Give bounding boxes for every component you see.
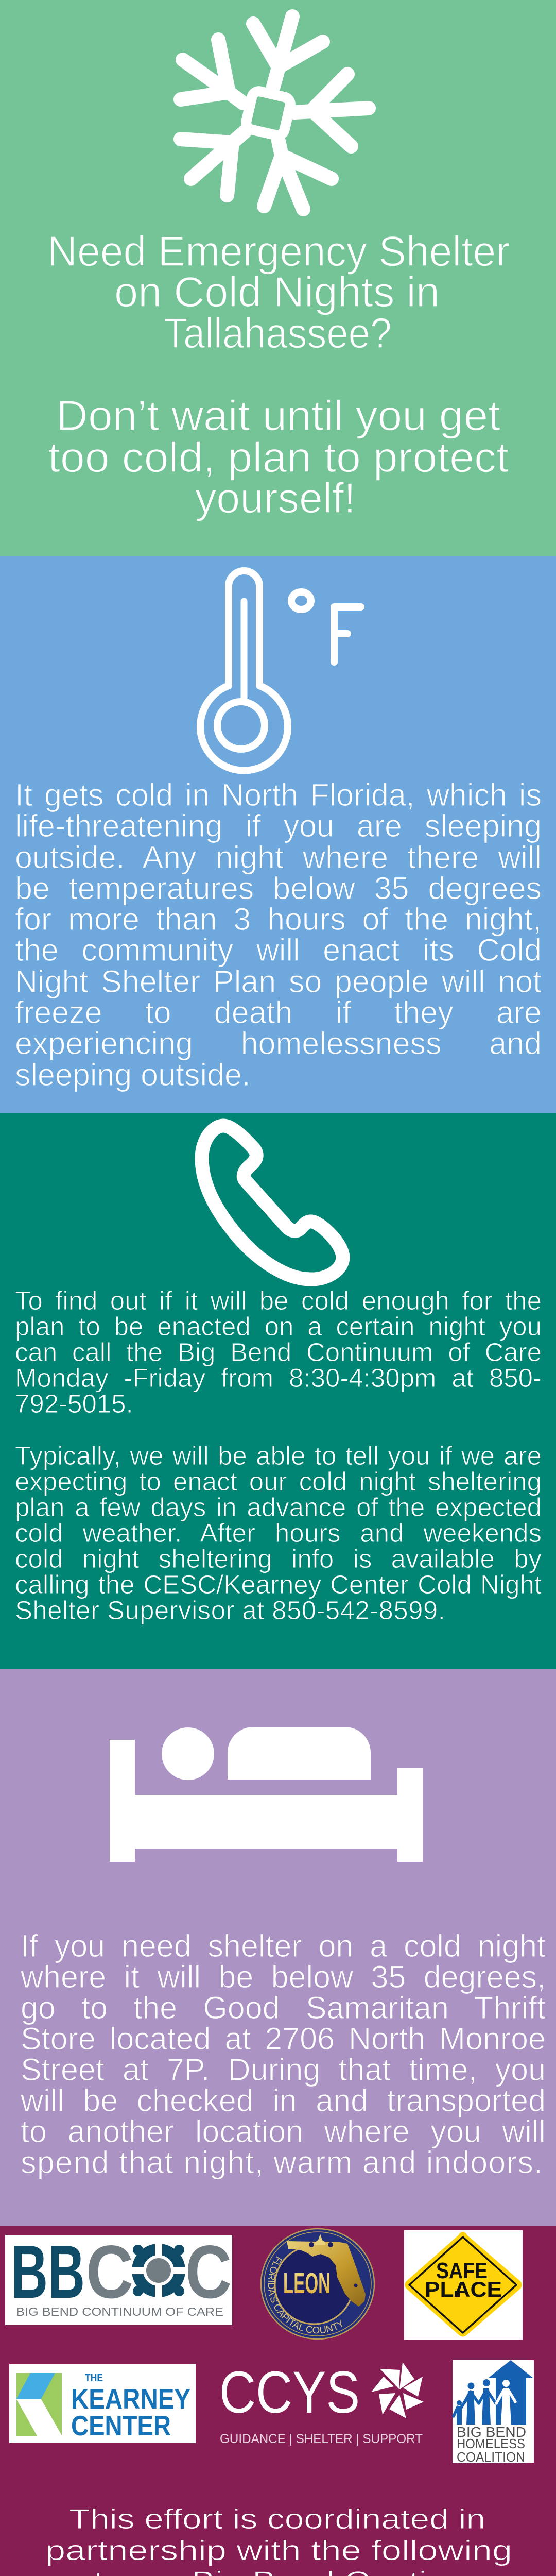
logo: The Kearney Center: THE <box>85 2372 103 2384</box>
text: phone numbers and hours: plan a few days in advance of the expected <box>15 1493 542 1522</box>
text: when the plan is enacted: Night Shelter Plan so people will not <box>15 964 542 999</box>
logo: CCYS <box>219 2360 424 2446</box>
text: partners list: partnership with the following <box>45 2534 512 2566</box>
title: Tallahassee? <box>164 309 392 357</box>
text: when the plan is enacted: the community will enact its Cold <box>15 933 542 968</box>
logo: Leon County seal <box>260 2228 375 2340</box>
icon: bed <box>110 1727 423 1862</box>
panel: cold threshold <box>0 556 556 1113</box>
logo: CCYS: GUIDANCE | SHELTER | SUPPORT <box>220 2432 423 2446</box>
logo: Big Bend Continuum of Care: BIG BEND CONTINUUM OF CARE <box>16 2305 223 2318</box>
icon: snowflake <box>181 16 369 209</box>
panel: how to find out <box>0 1113 556 1669</box>
text: shelter location <box>21 1930 546 2183</box>
logo: Leon County seal: FLORIDA’S CAPITAL COUNTY <box>268 2256 343 2334</box>
logo: Safe Place: PLACE <box>425 2277 502 2301</box>
text: phone numbers and hours: expecting to enact our cold night sheltering <box>15 1467 542 1496</box>
text: when the plan is enacted: for more than 3 hours of the night, <box>15 902 542 937</box>
logo: Big Bend Homeless Coalition: BIG BEND <box>457 2424 526 2440</box>
panel: where to go <box>0 1669 556 2226</box>
text: when the plan is enacted: freeze to death if they are <box>15 995 542 1030</box>
logo: Safe Place <box>404 2230 523 2340</box>
text: when the plan is enacted: sleeping outside. <box>15 1057 251 1092</box>
text: shelter location: where it will be below 35 degrees, <box>21 1959 546 1994</box>
text: when the plan is enacted: experiencing homelessness and <box>15 1026 542 1061</box>
logo: The Kearney Center: CENTER <box>71 2410 171 2442</box>
title: too cold, plan to protect <box>48 433 509 481</box>
text: when the plan is enacted <box>15 779 542 1094</box>
panel: intro <box>0 0 556 556</box>
text: shelter location: Street at 7P. During that time, you <box>21 2052 546 2087</box>
text: when the plan is enacted: outside. Any night where there will <box>15 840 542 875</box>
text: phone numbers and hours: can call the Big Bend Continuum of Care <box>15 1337 542 1367</box>
title <box>47 227 510 522</box>
panel: partners <box>0 2226 556 2576</box>
logo: The Kearney Center: KEARNEY <box>71 2383 190 2415</box>
logo: The Kearney Center <box>9 2364 196 2443</box>
text: phone numbers and hours: 792-5015. <box>15 1389 133 1418</box>
logo: Big Bend Homeless Coalition: COALITION <box>457 2449 525 2465</box>
text: phone numbers and hours: Shelter Supervisor at 850-542-8599. <box>15 1596 445 1625</box>
logo: Big Bend Continuum of Care: C <box>185 2230 232 2314</box>
title: Don’t wait until you get <box>56 392 500 439</box>
text: phone numbers and hours: cold night sheltering info is available by <box>15 1544 542 1573</box>
text: phone numbers and hours: cold weather. After hours and weekends <box>15 1518 542 1548</box>
icon: thermometer with degrees F <box>200 571 361 771</box>
logo: Big Bend Homeless Coalition: HOMELESS <box>457 2436 525 2451</box>
text: partners list: This effort is coordinated in <box>69 2503 485 2535</box>
title: Need Emergency Shelter <box>47 227 510 275</box>
text: when the plan is enacted: life-threatening if you are sleeping <box>15 808 542 843</box>
title: yourself! <box>195 474 356 522</box>
logo: Big Bend Continuum of Care <box>5 2230 232 2325</box>
text: shelter location: go to the Good Samaritan Thrift <box>21 1990 546 2025</box>
text: shelter location: will be checked in and transported <box>21 2083 546 2118</box>
title: on Cold Nights in <box>114 268 440 316</box>
text: shelter location: spend that night, warm and indoors. <box>21 2145 543 2180</box>
text: shelter location: to another location where you will <box>21 2114 546 2149</box>
text: phone numbers and hours: Monday -Friday from 8:30-4:30pm at 850- <box>15 1363 542 1393</box>
text: shelter location: Store located at 2706 North Monroe <box>21 2021 546 2056</box>
logo: Big Bend Homeless Coalition <box>453 2360 534 2465</box>
text: phone numbers and hours: calling the CESC/Kearney Center Cold Night <box>15 1570 542 1599</box>
logo: Big Bend Continuum of Care: BB <box>11 2230 85 2314</box>
text: when the plan is enacted: be temperatures below 35 degrees <box>15 871 542 906</box>
logo: Big Bend Continuum of Care: C <box>86 2230 133 2314</box>
logo: Safe Place: SAFE <box>436 2258 488 2283</box>
logo: CCYS: CCYS <box>219 2360 360 2426</box>
icon: phone handset <box>202 1126 343 1279</box>
text: partners list <box>43 2503 515 2576</box>
logo: Leon County seal: LEON <box>283 2267 331 2300</box>
text: phone numbers and hours <box>15 1288 542 1628</box>
text: phone numbers and hours: plan to be enacted on a certain night you <box>15 1312 542 1341</box>
text: phone numbers and hours: Typically, we will be able to tell you if we are <box>15 1441 542 1470</box>
